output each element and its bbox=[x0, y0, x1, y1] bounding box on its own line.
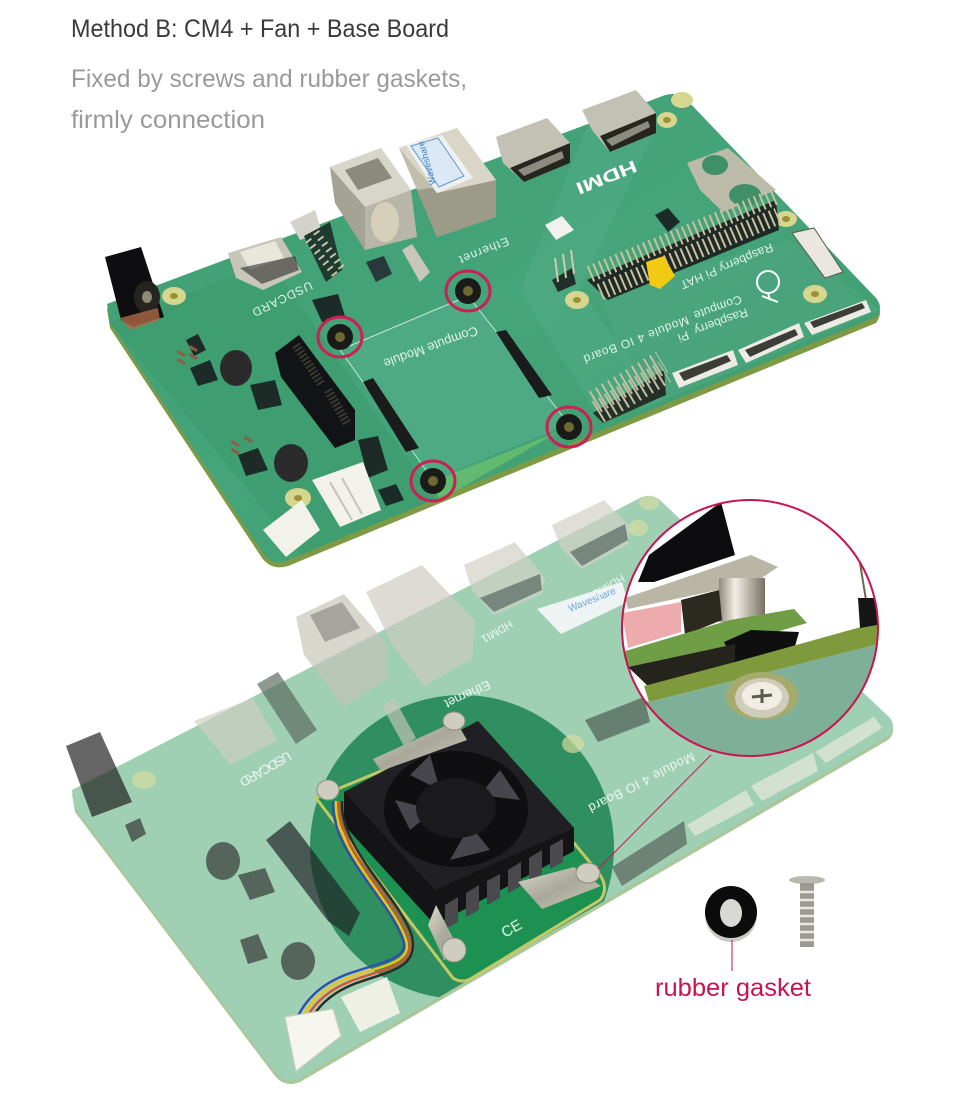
white connector small bbox=[341, 977, 400, 1032]
screw photo bbox=[789, 876, 825, 947]
crystal bbox=[402, 244, 430, 282]
HDMI1 port bbox=[496, 118, 570, 182]
silkscreen labels: Compute Module bbox=[381, 323, 480, 371]
PCIe slot bbox=[275, 335, 355, 448]
silkscreen labels: Ethernet bbox=[456, 234, 511, 267]
power jack bbox=[105, 247, 164, 330]
board surface bbox=[107, 94, 880, 562]
micro SD slot bbox=[228, 237, 302, 290]
Ethernet port with label bbox=[399, 128, 496, 237]
PoE header bbox=[552, 250, 576, 292]
lens screw bbox=[726, 672, 798, 720]
board connector upper bbox=[496, 330, 552, 398]
USB bbox=[296, 594, 387, 707]
bottom pin header bbox=[593, 362, 666, 423]
chips bbox=[186, 208, 680, 506]
subtitle bbox=[71, 65, 467, 134]
silkscreen labels: Compute bbox=[692, 292, 744, 323]
faded silkscreen labels: HDMI1 bbox=[479, 617, 514, 645]
fan hub bbox=[416, 778, 496, 838]
silkscreen labels: Pi bbox=[676, 328, 691, 345]
base board edge bbox=[644, 622, 879, 702]
CAM0 connector bbox=[792, 228, 843, 278]
rubber gasket photo bbox=[705, 886, 757, 942]
subtitle: firmly connection bbox=[71, 106, 265, 134]
faded silkscreen labels: Ethernet bbox=[441, 677, 493, 712]
CE mark: CE bbox=[498, 916, 525, 941]
cm4 module bbox=[316, 730, 605, 981]
sticker: Waveshare bbox=[567, 586, 618, 615]
module board bbox=[622, 609, 807, 667]
jack bbox=[66, 732, 132, 817]
crystal bbox=[382, 698, 416, 746]
DISP0 connector bbox=[738, 323, 804, 363]
micro USB and header bbox=[290, 210, 342, 282]
gap shadow bbox=[628, 644, 735, 688]
white fan connector bbox=[312, 462, 381, 527]
holes bbox=[132, 496, 659, 789]
fan cable bbox=[296, 801, 413, 1026]
wire right bbox=[858, 562, 867, 598]
heatsink vents bbox=[445, 839, 563, 929]
inductors and chips bbox=[125, 818, 315, 980]
silkscreen labels: Raspberry bbox=[692, 305, 750, 337]
spotlight bbox=[310, 695, 614, 999]
CAM1 connector bbox=[804, 300, 871, 335]
base board top bbox=[646, 644, 876, 755]
white connector with cable bbox=[285, 1009, 341, 1071]
screws bbox=[317, 712, 600, 962]
yellow jumper bbox=[646, 256, 675, 289]
fan edge bbox=[638, 502, 735, 582]
silkscreen labels: Raspberry Pi HAT bbox=[678, 240, 775, 292]
title: Method B: CM4 + Fan + Base Board bbox=[71, 15, 449, 43]
bracket bbox=[625, 555, 778, 609]
fan blades bbox=[384, 751, 528, 867]
silkscreen labels: Module 4 IO Board bbox=[581, 313, 691, 366]
faded silkscreen labels: USDCARD bbox=[236, 748, 294, 790]
subtitle: Fixed by screws and rubber gaskets, bbox=[71, 65, 467, 93]
callout: leader line bbox=[598, 755, 711, 869]
HDMI logo text: HDMI bbox=[573, 156, 640, 198]
board edge bbox=[107, 96, 880, 567]
HAT pin header bbox=[587, 196, 779, 300]
dark component bbox=[681, 590, 722, 635]
small white connector bbox=[263, 500, 320, 557]
brackets bbox=[373, 721, 601, 960]
callout: magnified screw view bbox=[620, 500, 879, 760]
gasket leader line bbox=[731, 940, 733, 971]
faded silkscreen labels: HDMI0 bbox=[591, 571, 626, 599]
fan heatsink bbox=[344, 721, 574, 929]
HDMI0 bbox=[552, 500, 630, 569]
mounting holes bbox=[162, 92, 827, 508]
RJ45 bbox=[366, 565, 475, 686]
SD slot bbox=[194, 698, 277, 765]
faded components bbox=[66, 496, 882, 980]
board shading zones bbox=[110, 120, 880, 565]
gasket label: rubber gasket bbox=[655, 974, 811, 1002]
gasket bbox=[724, 630, 799, 665]
silkscreen labels bbox=[249, 234, 775, 371]
micro USB header bbox=[257, 672, 317, 744]
faded board edge bbox=[72, 498, 893, 1084]
label sticker: Waveshare bbox=[416, 140, 438, 186]
panel: lower assembled board bbox=[66, 496, 893, 1084]
highlight: screw gaskets bbox=[318, 271, 591, 501]
header pins bbox=[612, 821, 687, 886]
sticker bbox=[537, 582, 628, 634]
silkscreen labels: USDCARD bbox=[249, 278, 315, 320]
HDMI1 bbox=[464, 542, 545, 615]
standoff bbox=[719, 578, 765, 622]
thermal pad bbox=[622, 602, 681, 648]
panel: top base board bbox=[105, 90, 880, 567]
faded silkscreen labels: Module 4 IO Board bbox=[585, 749, 697, 816]
PCIe bbox=[266, 821, 360, 936]
QR sticker bbox=[545, 216, 574, 240]
inductors bbox=[220, 350, 308, 482]
battery holder bbox=[687, 148, 776, 212]
ribbon connectors bbox=[687, 717, 882, 836]
resistor clusters bbox=[176, 345, 253, 455]
faded board surface bbox=[72, 496, 893, 1081]
USB port bbox=[330, 148, 417, 250]
faded silkscreen labels bbox=[236, 571, 697, 816]
raspberry logo bbox=[757, 271, 779, 302]
DISP1 connector bbox=[672, 350, 738, 388]
board connector lower bbox=[363, 378, 419, 452]
HDMI0 port bbox=[582, 90, 656, 152]
